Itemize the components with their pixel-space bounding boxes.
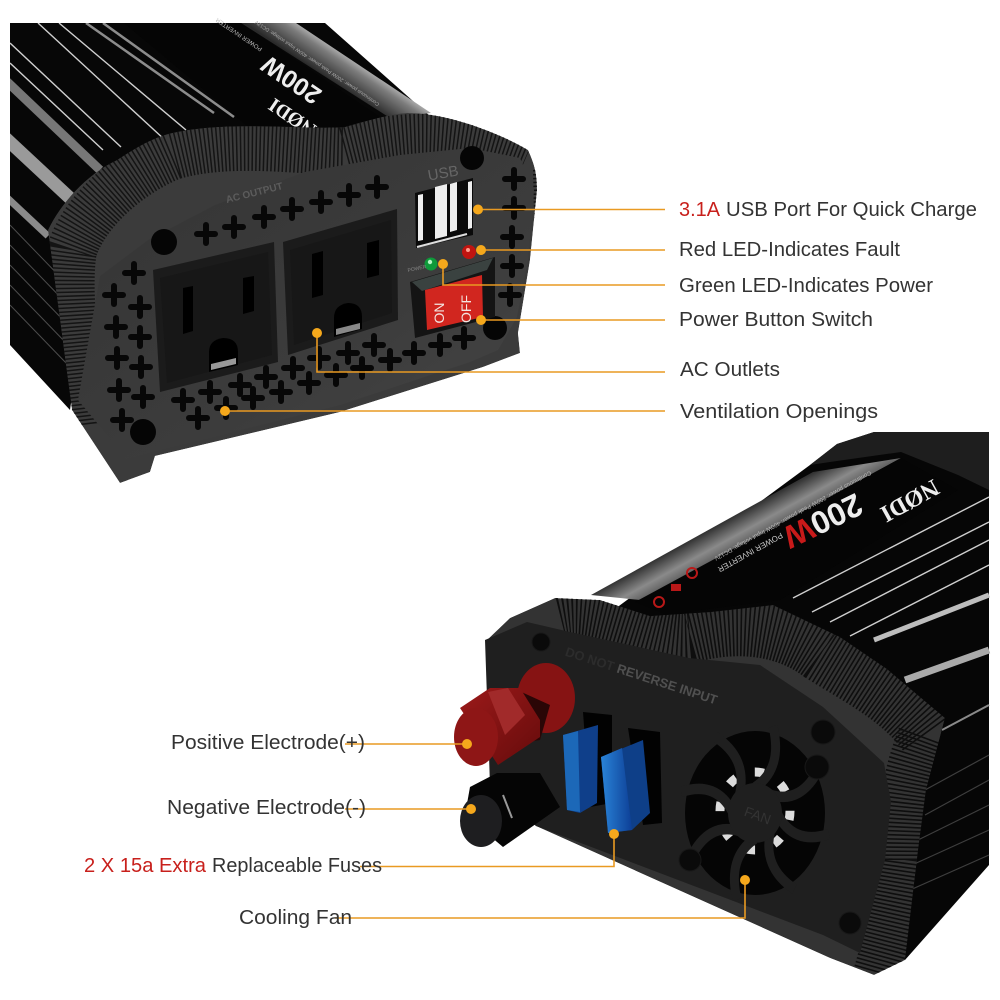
fan grille	[681, 726, 829, 900]
heat sink ribs	[793, 497, 989, 890]
label: ventilation: Ventilation Openings	[680, 401, 878, 423]
fuse sockets	[583, 712, 662, 825]
screws	[532, 633, 861, 934]
green LED	[424, 258, 438, 270]
warning icons	[654, 568, 697, 607]
label panel	[124, 16, 381, 141]
reverse input warning text: DO NOT REVERSE INPUT	[564, 644, 719, 707]
callout: green LED	[438, 259, 665, 285]
spec text: Continuous power: 200W Peak power: 400W Input voltage: DC12V	[254, 18, 381, 107]
label: fuses: Replaceable Fuses	[212, 855, 382, 877]
callout: ventilation	[220, 406, 665, 416]
label: positive electrode: Positive Electrode(+)	[171, 732, 365, 754]
fuses	[563, 712, 662, 833]
bottom inverter unit	[454, 432, 989, 975]
fan blades	[681, 726, 829, 900]
positive terminal	[454, 663, 575, 766]
silver top strip	[591, 458, 901, 600]
label: AC outlets: AC Outlets	[680, 359, 780, 381]
heat sink ribs	[0, 23, 234, 365]
spec text: Continuous power: 200W Peak power: 400W Input voltage: DC12V	[713, 469, 872, 561]
callout: AC outlets	[312, 328, 665, 372]
label: green LED: Green LED-Indicates Power	[679, 275, 933, 297]
label: cooling fan: Cooling Fan	[239, 907, 352, 929]
brand text: NØDI	[265, 93, 320, 141]
AC output text: AC OUTPUT	[225, 181, 284, 206]
OFF label: OFF	[458, 295, 474, 323]
callout: power switch	[476, 315, 665, 325]
power switch	[410, 257, 495, 338]
fan label: FAN	[742, 803, 773, 827]
label: USB port: 3.1A	[679, 199, 721, 221]
callout: negative electrode	[345, 804, 476, 814]
AC outlets	[153, 209, 398, 392]
right outlet	[283, 209, 398, 355]
model text: 200W	[256, 50, 326, 109]
ON label: ON	[431, 302, 447, 324]
label: red LED: Red LED-Indicates Fault	[679, 239, 900, 261]
end cap at far side	[810, 432, 989, 490]
USB text: USB	[427, 163, 460, 185]
front plate	[485, 622, 891, 953]
left fuse	[563, 725, 598, 813]
screw holes	[130, 146, 507, 445]
label: fuses	[84, 855, 382, 877]
top inverter unit	[0, 16, 538, 483]
label: power switch: Power Button Switch	[679, 309, 873, 331]
label: USB port: USB Port For Quick Charge	[726, 199, 977, 221]
callout: cooling fan	[335, 875, 750, 918]
power label: POWER	[407, 264, 427, 274]
left outlet	[153, 242, 278, 392]
brand text: NØDI	[876, 474, 943, 527]
right fuse	[601, 740, 650, 833]
ribbed end cap	[48, 113, 538, 483]
callout: red LED	[476, 245, 665, 255]
label panel	[635, 458, 958, 616]
negative terminal	[460, 773, 560, 847]
red LED	[462, 245, 476, 259]
label: fuses: 2 X 15a Extra	[84, 855, 207, 877]
model text: 200W	[777, 486, 868, 556]
label: negative electrode: Negative Electrode(-)	[167, 797, 366, 819]
silver side strip	[241, 23, 431, 118]
inverter body	[600, 432, 989, 960]
callout: USB	[473, 204, 665, 214]
callout: positive electrode	[345, 739, 472, 749]
power inverter text: POWER INVERTER	[215, 16, 264, 52]
callout: fuses	[360, 829, 619, 866]
power inverter text: POWER INVERTER	[716, 531, 784, 574]
front plate	[78, 148, 534, 460]
inverter body	[10, 23, 440, 410]
ventilation crosses	[105, 170, 523, 429]
ribbed end cap	[487, 598, 945, 975]
USB ports	[415, 178, 473, 248]
